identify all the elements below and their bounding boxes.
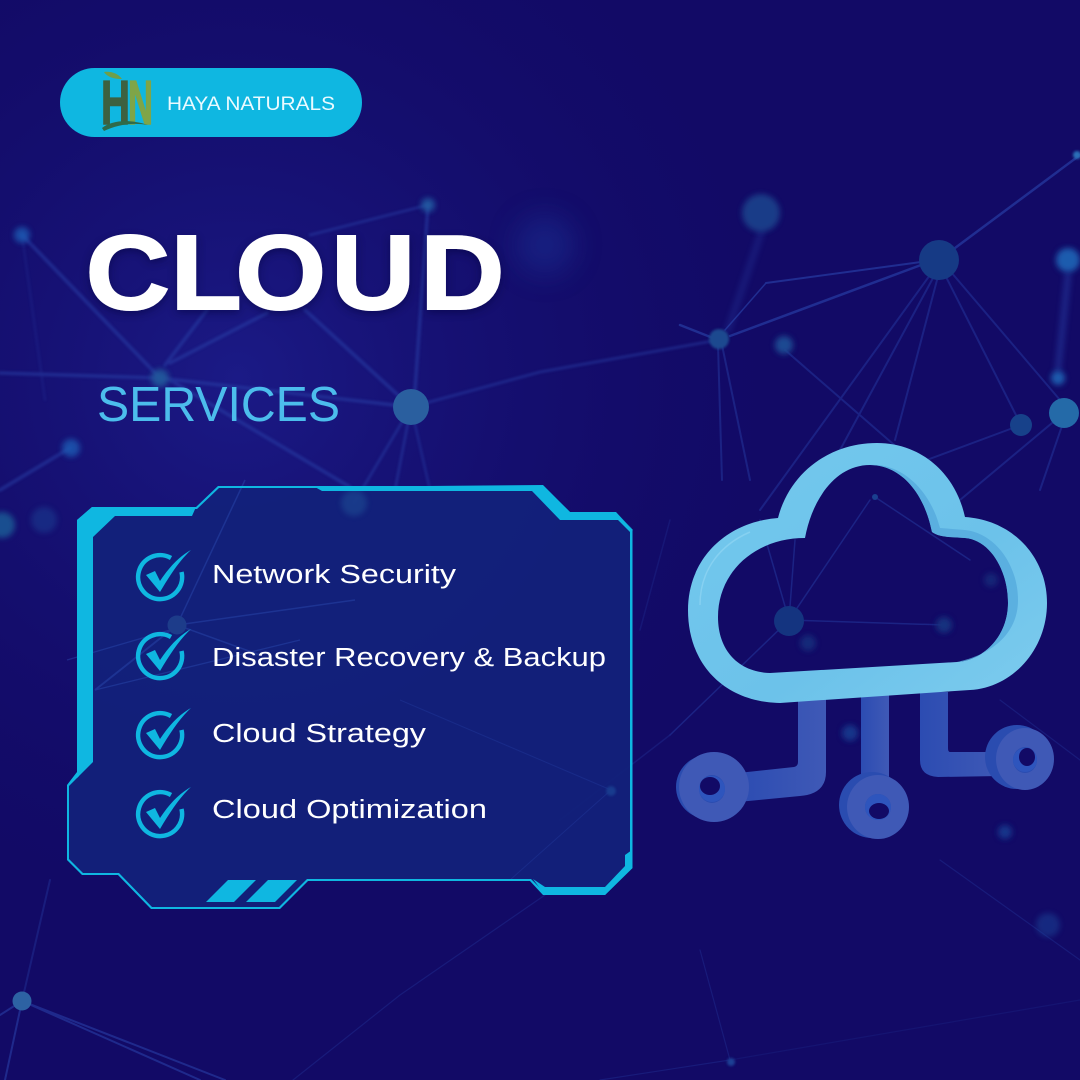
circuit: left ring: [676, 752, 749, 822]
cloud body: [688, 443, 1047, 703]
circuit: left wire: [738, 695, 826, 802]
circuit: right wire: [920, 692, 1002, 777]
circuit: right ring: [985, 725, 1054, 790]
panel: services list: [67, 480, 633, 909]
label: Disaster Recovery & Backup: [212, 644, 606, 672]
logo: HN: H: [101, 69, 130, 138]
cloud inner wall shading: [870, 465, 1018, 662]
circuit: middle ring: [839, 772, 909, 839]
icon: check circle: [138, 787, 191, 836]
panel frame: [67, 485, 633, 909]
brand name: HAYA NATURALS: [167, 93, 335, 115]
illustration: cloud with circuit: [676, 443, 1054, 839]
network seen through panel: [67, 480, 616, 880]
frame thick top band: [315, 485, 633, 532]
logo: HN: N: [128, 69, 153, 138]
label: Cloud Optimization: [212, 796, 487, 824]
icon: check circle: [138, 708, 191, 757]
frame thick bottom-right band: [533, 850, 632, 895]
panel fill: [67, 486, 632, 909]
pill background: [60, 68, 362, 137]
list item: Cloud Optimization: [138, 787, 487, 836]
frame thick left band: [77, 507, 196, 778]
subtitle: SERVICES: SERVICES: [97, 378, 340, 432]
list item: Cloud Strategy: [138, 708, 426, 757]
circuit: middle wire: [861, 694, 889, 785]
label: Cloud Strategy: [212, 720, 426, 748]
cloud highlight: [700, 532, 750, 605]
label: Network Security: [212, 561, 456, 589]
title: CLOUD: CLOUD: [86, 213, 504, 332]
list item: Disaster Recovery & Backup: [138, 629, 606, 678]
footer stripes: [206, 880, 297, 902]
icon: check circle: [138, 550, 191, 599]
icon: check circle: [138, 629, 191, 678]
brand pill: [60, 68, 362, 138]
list item: Network Security: [138, 550, 456, 599]
